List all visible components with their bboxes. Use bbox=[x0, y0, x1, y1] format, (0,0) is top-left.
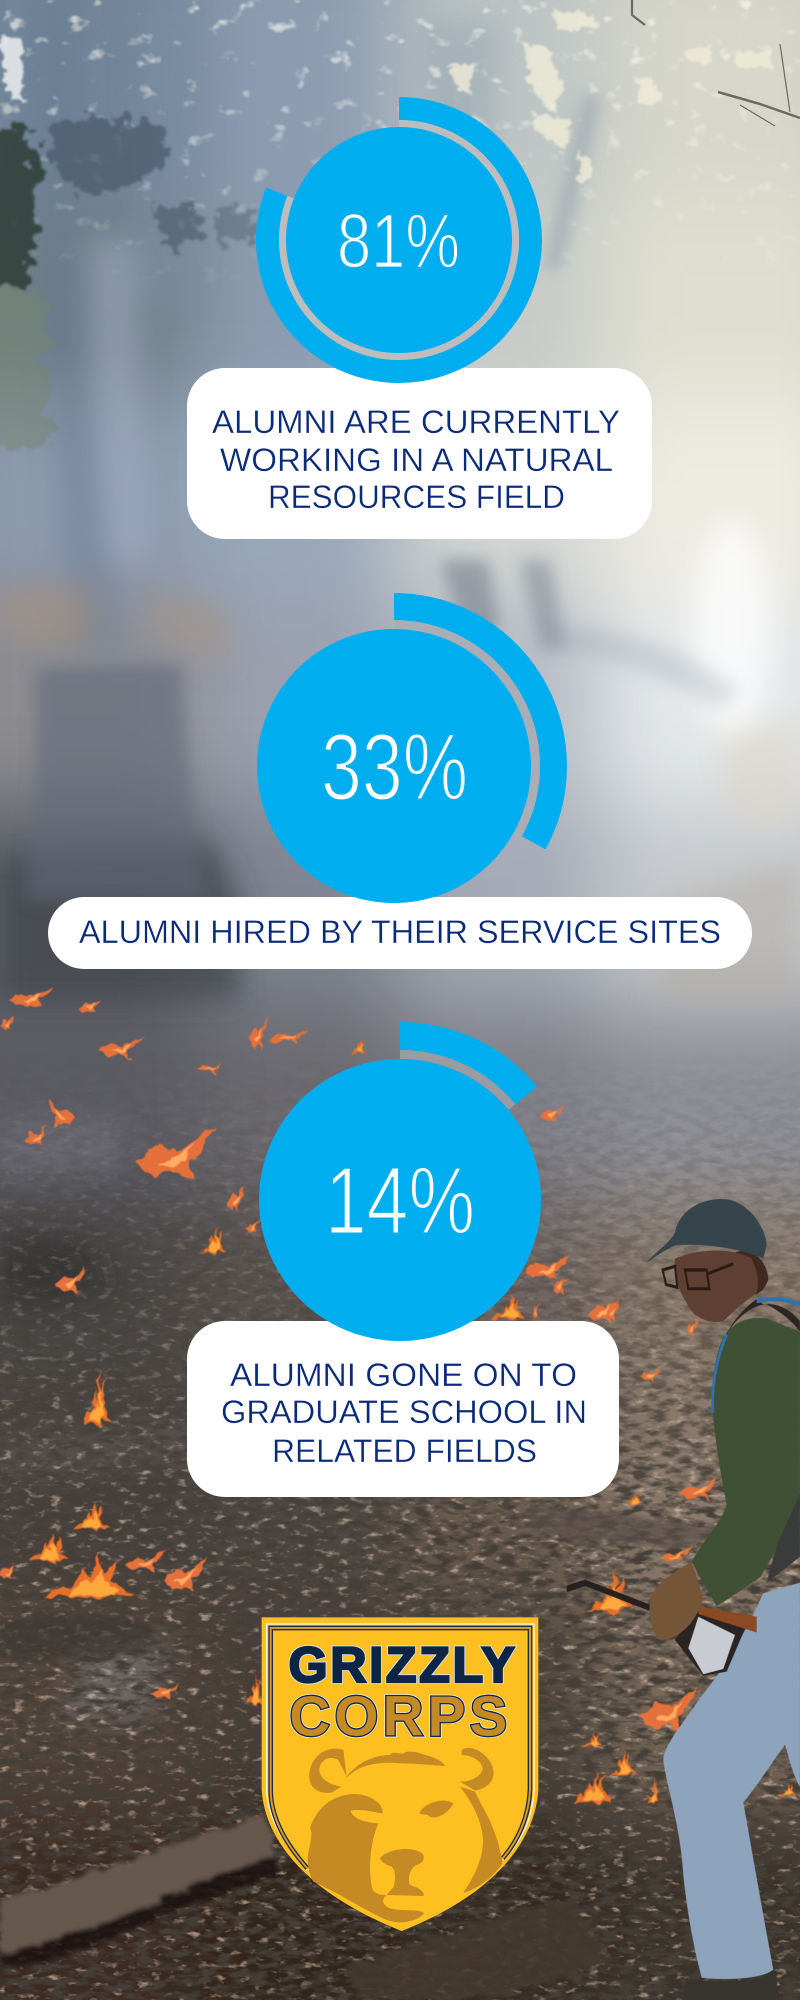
fallen logs bbox=[0, 1505, 730, 2000]
stat chart: 14% bbox=[259, 1036, 541, 1341]
caption panel: 81%: ALUMNI ARE CURRENTLY bbox=[212, 404, 620, 440]
progress ring 14% bbox=[400, 1036, 526, 1095]
wordmark: CORPS: CORPS bbox=[289, 1686, 507, 1749]
wordmark: CORPS: CORPS bbox=[289, 1686, 507, 1749]
caption panel: 33%: ALUMNI HIRED BY THEIR SERVICE SITES bbox=[79, 914, 721, 950]
bear face emblem bbox=[308, 1748, 503, 1922]
blue disc 81% bbox=[286, 127, 512, 353]
stat chart: 81% bbox=[267, 108, 530, 371]
caption panel: 81%: WORKING IN A NATURAL bbox=[220, 442, 613, 478]
wordmark: GRIZZLY: GRIZZLY bbox=[289, 1637, 515, 1693]
caption panel: 81% bbox=[187, 368, 652, 539]
bare branches in the upper right bbox=[632, 0, 800, 126]
number 81%: 81% bbox=[337, 198, 460, 284]
flames scattered across the burning forest floor bbox=[0, 987, 798, 1805]
caption panel: 33% bbox=[48, 897, 752, 969]
foliage in the upper left bbox=[0, 117, 255, 450]
inner grey ring 14% bbox=[400, 1054, 512, 1107]
blue disc 14% bbox=[259, 1059, 541, 1341]
wordmark: GRIZZLY: GRIZZLY bbox=[289, 1637, 515, 1693]
progress ring 33% bbox=[394, 607, 553, 843]
logo: Grizzly Corps shield bbox=[262, 1617, 538, 1931]
wordmark: CORPS: CORPS bbox=[289, 1686, 507, 1749]
caption panel: 14%: GRADUATE SCHOOL IN bbox=[221, 1394, 587, 1430]
caption panel: 81%: RESOURCES FIELD bbox=[268, 479, 565, 515]
caption panel: 14%: RELATED FIELDS bbox=[272, 1433, 537, 1469]
photo subject: crew member holding a drip torch bbox=[567, 1199, 800, 2000]
blue disc 33% bbox=[257, 629, 531, 903]
number 14%: 14% bbox=[325, 1148, 475, 1254]
inner grey ring 81% bbox=[283, 124, 516, 356]
stat chart: 33% bbox=[257, 607, 553, 903]
progress ring 81% bbox=[267, 108, 530, 371]
sunlight patches through the canopy bbox=[0, 10, 772, 184]
caption panel: 14% bbox=[187, 1321, 619, 1497]
number 33%: 33% bbox=[321, 714, 468, 820]
inner grey ring 33% bbox=[394, 624, 536, 834]
caption panel: 14%: ALUMNI GONE ON TO bbox=[230, 1357, 577, 1393]
